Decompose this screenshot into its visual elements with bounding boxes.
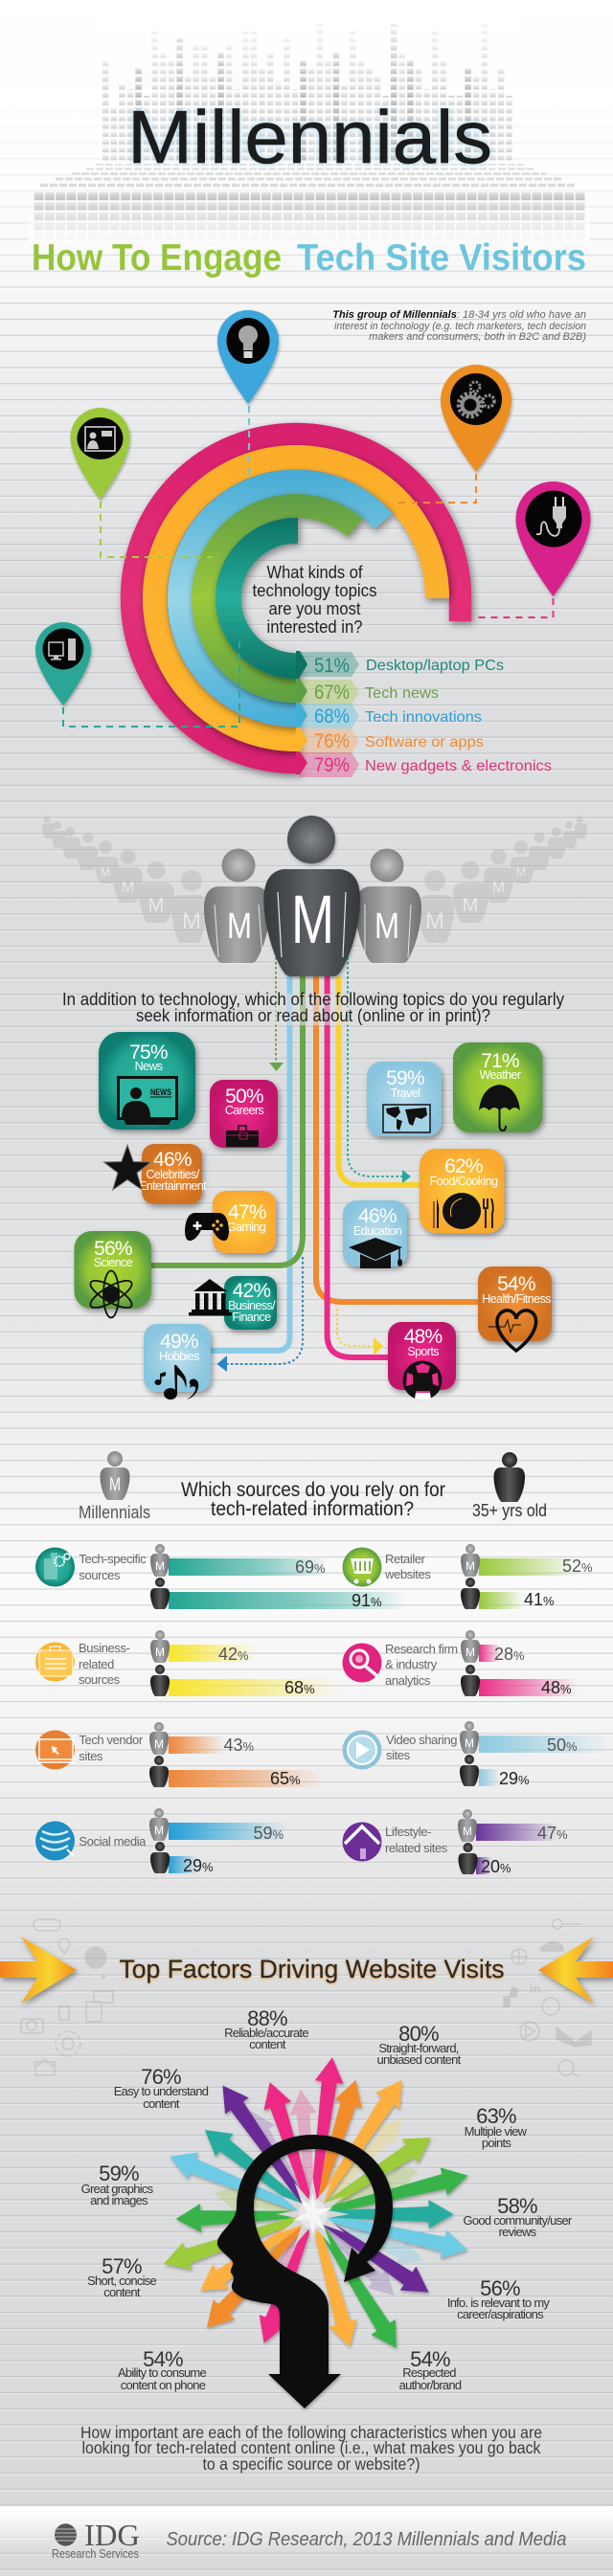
faded crowd of millennial figures, right wing: M bbox=[492, 880, 505, 896]
ring legend: percentages and labels: 68% bbox=[314, 706, 350, 728]
dotted path arrowheads bbox=[216, 1063, 411, 1372]
factor: short, concise: Short, concise bbox=[87, 2274, 156, 2288]
ring legend: percentages and labels: Tech news bbox=[365, 685, 439, 702]
source row: research firm & industry analytics: 48% bbox=[541, 1678, 572, 1697]
factor: great graphics bbox=[81, 2162, 154, 2207]
subtitle: How To Engage bbox=[32, 237, 282, 279]
pin: software or apps (gears) bbox=[441, 365, 511, 472]
source row: tech-specific sources: sources bbox=[79, 1568, 121, 1582]
solid arrows bbox=[159, 2055, 471, 2356]
factor: multiple view points: points bbox=[482, 2136, 511, 2150]
ring question: are you most bbox=[268, 599, 360, 618]
icon: game controller bbox=[185, 1213, 229, 1241]
question: other topics: seek information or read about (online or in print)? bbox=[136, 1006, 490, 1025]
source row: business-related sources: 42% bbox=[218, 1645, 249, 1664]
ring legend: percentages and labels: Software or apps bbox=[365, 734, 484, 750]
factor: consume on phone: Ability to consume bbox=[118, 2365, 207, 2380]
source row: research firm & industry analytics: & industry bbox=[385, 1657, 438, 1671]
factor: reliable/accurate: Reliable/accurate bbox=[224, 2026, 308, 2040]
icon: house bbox=[343, 1823, 381, 1861]
source row: business-related sources: sources bbox=[79, 1672, 121, 1687]
factor: short, concise: 57% bbox=[102, 2254, 142, 2278]
source row: tech vendor sites: 43% bbox=[224, 1736, 255, 1755]
source row: social media: M bbox=[154, 1824, 164, 1837]
right millennial figure bbox=[355, 848, 421, 963]
topic box: food/cooking: 62% bbox=[444, 1155, 483, 1177]
intro note bbox=[332, 309, 586, 343]
faded crowd of millennial figures, right wing: M bbox=[425, 908, 444, 934]
source row: tech-specific sources: Tech-specific bbox=[79, 1552, 147, 1566]
pin: new gadgets (plug) bbox=[515, 482, 590, 596]
ring: new gadgets & electronics bbox=[132, 435, 460, 762]
faded crowd of millennial figures, left wing: M bbox=[101, 865, 110, 879]
factor: respected author/brand: author/brand bbox=[399, 2378, 462, 2392]
intro note: makers and consumers, both in B2C and B2B) bbox=[369, 331, 586, 343]
source row: lifestyle-related sites: M bbox=[463, 1825, 472, 1838]
ring: tech news bbox=[203, 505, 355, 691]
topic box: careers: Careers bbox=[225, 1104, 263, 1117]
factor: reliable/accurate: 88% bbox=[247, 2006, 287, 2030]
source row: research firm & industry analytics: 28% bbox=[494, 1645, 525, 1664]
faded background icons, right: in bbox=[530, 1982, 541, 1996]
icon: music notes bbox=[155, 1365, 198, 1400]
topic box: weather: 71% bbox=[481, 1050, 519, 1072]
IDG logo: IDG bbox=[84, 2518, 140, 2552]
source row: retailer websites: 52% bbox=[562, 1557, 593, 1576]
icon: atom bbox=[87, 1271, 135, 1317]
icon: vendor tablet bbox=[35, 1731, 75, 1769]
icon: briefcase bbox=[226, 1126, 259, 1147]
factor: relevant info bbox=[447, 2276, 550, 2321]
topic box: gaming: 47% bbox=[228, 1201, 266, 1223]
central millennial figure: M bbox=[291, 883, 334, 958]
faded crowd of millennial figures, right wing: M bbox=[463, 895, 478, 916]
source row: research firm & industry analytics: M bbox=[465, 1646, 475, 1659]
faded crowd of millennial figures, right wing bbox=[419, 816, 587, 943]
topic box: sports: 48% bbox=[404, 1326, 443, 1348]
topic box: hobbies: 49% bbox=[160, 1331, 198, 1353]
radial arrow burst bbox=[159, 2055, 471, 2356]
topic box: news: News bbox=[135, 1060, 163, 1073]
topic box: travel: 59% bbox=[386, 1067, 424, 1089]
factor: short, concise bbox=[87, 2254, 156, 2299]
factor: great graphics: Great graphics bbox=[81, 2182, 154, 2196]
IDG logo: Research Services bbox=[52, 2547, 139, 2561]
factor: consume on phone: 54% bbox=[143, 2347, 183, 2371]
ring: desktop/laptop PCs bbox=[228, 530, 300, 666]
topic box: food/cooking bbox=[420, 1149, 504, 1233]
topic box: weather bbox=[453, 1042, 542, 1132]
ring legend: percentages and labels: 51% bbox=[314, 655, 350, 677]
source row: video sharing sites: Video sharing bbox=[386, 1733, 457, 1747]
topic box: sports: Sports bbox=[407, 1345, 439, 1358]
ring: tech innovations bbox=[180, 482, 383, 714]
factor: multiple view points bbox=[465, 2104, 528, 2150]
topic box: education: 46% bbox=[358, 1205, 397, 1227]
icon: tech-specific buildings and gear bbox=[35, 1547, 75, 1587]
factor: relevant info: career/aspirations bbox=[457, 2307, 544, 2321]
factor: straight-forward: 80% bbox=[398, 2022, 439, 2046]
icon: bank building bbox=[189, 1279, 232, 1315]
ring question: interested in? bbox=[266, 617, 362, 637]
ring legend: percentages and labels: 67% bbox=[314, 682, 350, 704]
source row: research firm & industry analytics: Research firm bbox=[385, 1642, 458, 1656]
source row: retailer websites: Retailer bbox=[385, 1552, 426, 1566]
factor: straight-forward bbox=[376, 2022, 462, 2067]
factor: easy to understand: 76% bbox=[141, 2065, 181, 2089]
topic box: travel bbox=[367, 1062, 442, 1136]
icon: graduation cap bbox=[349, 1238, 402, 1268]
topic box: celebrities/entertainment: Celebrities/ bbox=[146, 1168, 200, 1181]
factor: short, concise: content bbox=[103, 2285, 141, 2299]
factor labels bbox=[81, 2006, 573, 2392]
source row: lifestyle-related sites: Lifestyle- bbox=[385, 1825, 431, 1839]
factor: multiple view points: Multiple view bbox=[465, 2124, 528, 2139]
source row: lifestyle-related sites: related sites bbox=[385, 1841, 448, 1855]
factor: community reviews: reviews bbox=[499, 2225, 537, 2239]
faded background icons, right bbox=[504, 1919, 591, 2076]
factor: straight-forward: Straight-forward, bbox=[378, 2041, 459, 2055]
source row: video sharing sites: 29% bbox=[499, 1769, 530, 1788]
source row: lifestyle-related sites bbox=[343, 1809, 568, 1876]
source row: business-related sources: Business- bbox=[79, 1641, 130, 1655]
source row: tech-specific sources: 69% bbox=[295, 1557, 326, 1577]
source row: tech vendor sites: 65% bbox=[270, 1769, 301, 1788]
title: Millennials bbox=[127, 95, 492, 179]
topic box: business/finance: Business/ bbox=[228, 1299, 276, 1312]
faded crowd of millennial figures, right wing: M bbox=[516, 865, 526, 879]
ring legend: percentages and labels: New gadgets & electronics bbox=[365, 758, 552, 774]
source row: tech vendor sites: sites bbox=[79, 1749, 103, 1763]
icon: umbrella bbox=[479, 1085, 520, 1131]
ring legend: percentages and labels: Tech innovations bbox=[365, 709, 482, 726]
icon: shopping cart bbox=[343, 1547, 381, 1587]
question: other topics bbox=[62, 990, 564, 1025]
topic box: health/fitness: 54% bbox=[497, 1273, 535, 1295]
factor: reliable/accurate: content bbox=[249, 2037, 286, 2051]
source row: business-related sources bbox=[35, 1630, 340, 1697]
source row: social media: Social media bbox=[79, 1834, 147, 1848]
source row: lifestyle-related sites: 20% bbox=[481, 1857, 511, 1876]
heading arrow, right bbox=[538, 1937, 613, 2004]
topic box: business/finance bbox=[189, 1276, 277, 1330]
heading: top factors: Top Factors Driving Website Visits bbox=[119, 1955, 504, 1983]
left millennial figure bbox=[204, 848, 270, 963]
ring question: What kinds of bbox=[266, 563, 363, 582]
topic box: hobbies bbox=[144, 1324, 211, 1400]
topic box: celebrities/entertainment: 46% bbox=[153, 1149, 192, 1171]
faded crowd of millennial figures, left wing: M bbox=[148, 895, 164, 916]
source row: social media: 29% bbox=[183, 1856, 214, 1875]
pin: tech innovations (light bulb) bbox=[217, 310, 279, 404]
question: sources bbox=[181, 1479, 445, 1520]
question: characteristics: to a specific source or website?) bbox=[203, 2454, 420, 2474]
factor: community reviews: 58% bbox=[497, 2194, 537, 2218]
ring legend: percentages and labels: Desktop/laptop PCs bbox=[366, 658, 504, 674]
factor: consume on phone: content on phone bbox=[121, 2378, 206, 2392]
source row: social media bbox=[35, 1808, 288, 1875]
icon: star bbox=[103, 1145, 151, 1190]
factor: community reviews: Good community/user bbox=[464, 2213, 573, 2228]
factor: great graphics: 59% bbox=[99, 2162, 139, 2185]
question: other topics: In addition to technology, which of the following topics do you regularly bbox=[62, 990, 564, 1009]
factor: relevant info: Info. is relevant to my bbox=[447, 2296, 550, 2310]
factor: respected author/brand: Respected bbox=[402, 2365, 456, 2380]
icon: play button bbox=[343, 1731, 381, 1769]
topic box: gaming: Gaming bbox=[227, 1221, 266, 1234]
subtitle bbox=[32, 237, 586, 279]
footer band bbox=[0, 2506, 613, 2554]
source row: research firm & industry analytics bbox=[343, 1630, 579, 1697]
topic box: gaming bbox=[185, 1191, 276, 1253]
faded crowd of millennial figures, left wing bbox=[42, 816, 207, 943]
subtitle: Tech Site Visitors bbox=[297, 237, 586, 279]
faded background icons, left bbox=[21, 1919, 113, 2075]
faded arrows bbox=[212, 2088, 428, 2312]
topic box: health/fitness: Health/Fitness bbox=[482, 1292, 551, 1306]
faded crowd of millennial figures, left wing: M bbox=[182, 908, 201, 934]
source row: retailer websites: websites bbox=[384, 1567, 431, 1581]
source row: tech-specific sources: 91% bbox=[352, 1591, 382, 1610]
source row: video sharing sites bbox=[343, 1721, 613, 1788]
question: characteristics: How important are each of the following characteristics when you are bbox=[80, 2423, 542, 2442]
silver star at burst centre bbox=[276, 2178, 349, 2251]
source row: retailer websites bbox=[343, 1544, 593, 1609]
sources legend: millennials figure: M bbox=[109, 1475, 121, 1495]
source row: video sharing sites: M bbox=[465, 1736, 474, 1750]
topic box: business/finance: 42% bbox=[233, 1280, 270, 1302]
ring chart: technology topics bbox=[132, 435, 460, 762]
topic box: education: Education bbox=[353, 1224, 402, 1238]
factor: community reviews bbox=[464, 2194, 573, 2239]
question: sources: tech-related information? bbox=[211, 1498, 414, 1520]
coloured topic pathways bbox=[151, 957, 479, 1364]
topic box: celebrities/entertainment bbox=[103, 1144, 207, 1204]
factor: multiple view points: 63% bbox=[476, 2104, 516, 2128]
topic box: news: 75% bbox=[129, 1042, 168, 1064]
dashed connectors from pins to rings bbox=[63, 406, 554, 727]
ring legend: percentages and labels bbox=[314, 655, 552, 776]
source row: video sharing sites: sites bbox=[386, 1748, 411, 1762]
central millennial figure bbox=[264, 816, 360, 976]
topic box: weather: Weather bbox=[480, 1068, 521, 1082]
topic box: health/fitness bbox=[478, 1266, 552, 1351]
left millennial figure: M bbox=[227, 907, 252, 947]
topic box: sports bbox=[388, 1322, 456, 1400]
ring: software or apps bbox=[154, 457, 437, 739]
icon: heart with pulse bbox=[488, 1310, 536, 1351]
icon: world map bbox=[383, 1105, 430, 1132]
topic box: news bbox=[99, 1032, 195, 1130]
source row: research firm & industry analytics: analytics bbox=[385, 1673, 431, 1688]
source row: business-related sources: M bbox=[155, 1646, 165, 1659]
factor: easy to understand: Easy to understand bbox=[114, 2084, 209, 2098]
source row: video sharing sites: 50% bbox=[547, 1736, 578, 1755]
icon: plate and cutlery bbox=[434, 1193, 493, 1229]
source row: business-related sources: related bbox=[79, 1657, 114, 1671]
pin: tech news (monitor with presenter) bbox=[70, 408, 130, 500]
header: equalizer graphic bbox=[29, 19, 590, 241]
topic box: travel: Travel bbox=[391, 1086, 420, 1100]
heading arrow, left bbox=[0, 1937, 77, 2004]
topic box: food/cooking: Food/Cooking bbox=[430, 1175, 498, 1188]
source row: social media: 59% bbox=[253, 1824, 284, 1843]
intro note: interest in technology (e.g. tech marketers, tech decision bbox=[334, 321, 586, 332]
question: sources: Which sources do you rely on for bbox=[181, 1479, 445, 1501]
factor: consume on phone bbox=[118, 2347, 207, 2392]
ring question: technology topics bbox=[253, 581, 377, 600]
factor: straight-forward: unbiased content bbox=[376, 2052, 462, 2067]
intro note: This group of Millennials: 18-34 yrs old who have an bbox=[332, 309, 586, 321]
main millennial figures bbox=[204, 816, 421, 976]
topic box: science: 56% bbox=[94, 1238, 132, 1260]
text backing band over pathways bbox=[268, 994, 354, 1025]
right millennial figure: M bbox=[375, 907, 399, 947]
factor: reliable/accurate bbox=[224, 2006, 308, 2051]
topic box: science: Science bbox=[94, 1256, 133, 1269]
icon: yellow document bbox=[35, 1643, 75, 1681]
icon: soccer ball bbox=[402, 1361, 443, 1400]
title shadow bbox=[129, 172, 493, 180]
pin: desktop/laptop PCs bbox=[35, 622, 91, 706]
topic box: business/finance: Finance bbox=[232, 1310, 271, 1324]
ring legend: percentages and labels: 79% bbox=[314, 754, 350, 776]
factor: relevant info: 56% bbox=[480, 2276, 520, 2300]
question: characteristics: looking for tech-related content online (i.e., what makes you go back bbox=[82, 2438, 541, 2457]
source row: lifestyle-related sites: 47% bbox=[537, 1824, 568, 1843]
ring arrowheads and percent tags bbox=[296, 651, 359, 777]
topic box: science bbox=[75, 1231, 151, 1317]
factor: great graphics: and images bbox=[90, 2193, 148, 2207]
topic box: hobbies: Hobbies bbox=[159, 1350, 199, 1363]
sources legend: 35+ figure: 35+ yrs old bbox=[472, 1501, 547, 1520]
question: characteristics bbox=[80, 2423, 542, 2474]
factor: easy to understand: content bbox=[143, 2096, 180, 2111]
source note: Source: IDG Research, 2013 Millennials and Media bbox=[167, 2529, 567, 2550]
factor: respected author/brand bbox=[399, 2347, 462, 2392]
IDG logo bbox=[52, 2518, 140, 2561]
source row: tech-specific sources bbox=[35, 1544, 406, 1610]
source row: retailer websites: 41% bbox=[524, 1590, 555, 1609]
factor: easy to understand bbox=[114, 2065, 209, 2111]
source row: tech vendor sites bbox=[35, 1722, 325, 1788]
faded crowd of millennial figures, left wing: M bbox=[122, 880, 134, 896]
sources legend: millennials figure bbox=[79, 1451, 150, 1522]
source row: retailer websites: M bbox=[465, 1559, 475, 1573]
source row: business-related sources: 68% bbox=[284, 1678, 315, 1697]
factor: respected author/brand: 54% bbox=[410, 2347, 450, 2371]
topic box: careers: 50% bbox=[225, 1086, 263, 1108]
source row: tech-specific sources: M bbox=[155, 1559, 165, 1573]
sources legend: millennials figure: Millennials bbox=[79, 1503, 150, 1522]
source row: tech vendor sites: M bbox=[154, 1737, 164, 1751]
topic box: education bbox=[343, 1200, 407, 1268]
source row: tech vendor sites: Tech vendor bbox=[79, 1733, 144, 1747]
topic box: careers bbox=[210, 1080, 278, 1148]
head silhouette with looping arrow bbox=[217, 2135, 393, 2408]
icon: news TV: NEWS bbox=[150, 1087, 171, 1097]
ring question bbox=[253, 563, 377, 637]
icon: social globe rings bbox=[35, 1821, 75, 1861]
sources legend: 35+ figure bbox=[472, 1452, 547, 1520]
ring legend: percentages and labels: 76% bbox=[314, 730, 350, 752]
topic box: celebrities/entertainment: Entertainment bbox=[139, 1179, 207, 1193]
icon: magnifier bbox=[343, 1643, 381, 1683]
